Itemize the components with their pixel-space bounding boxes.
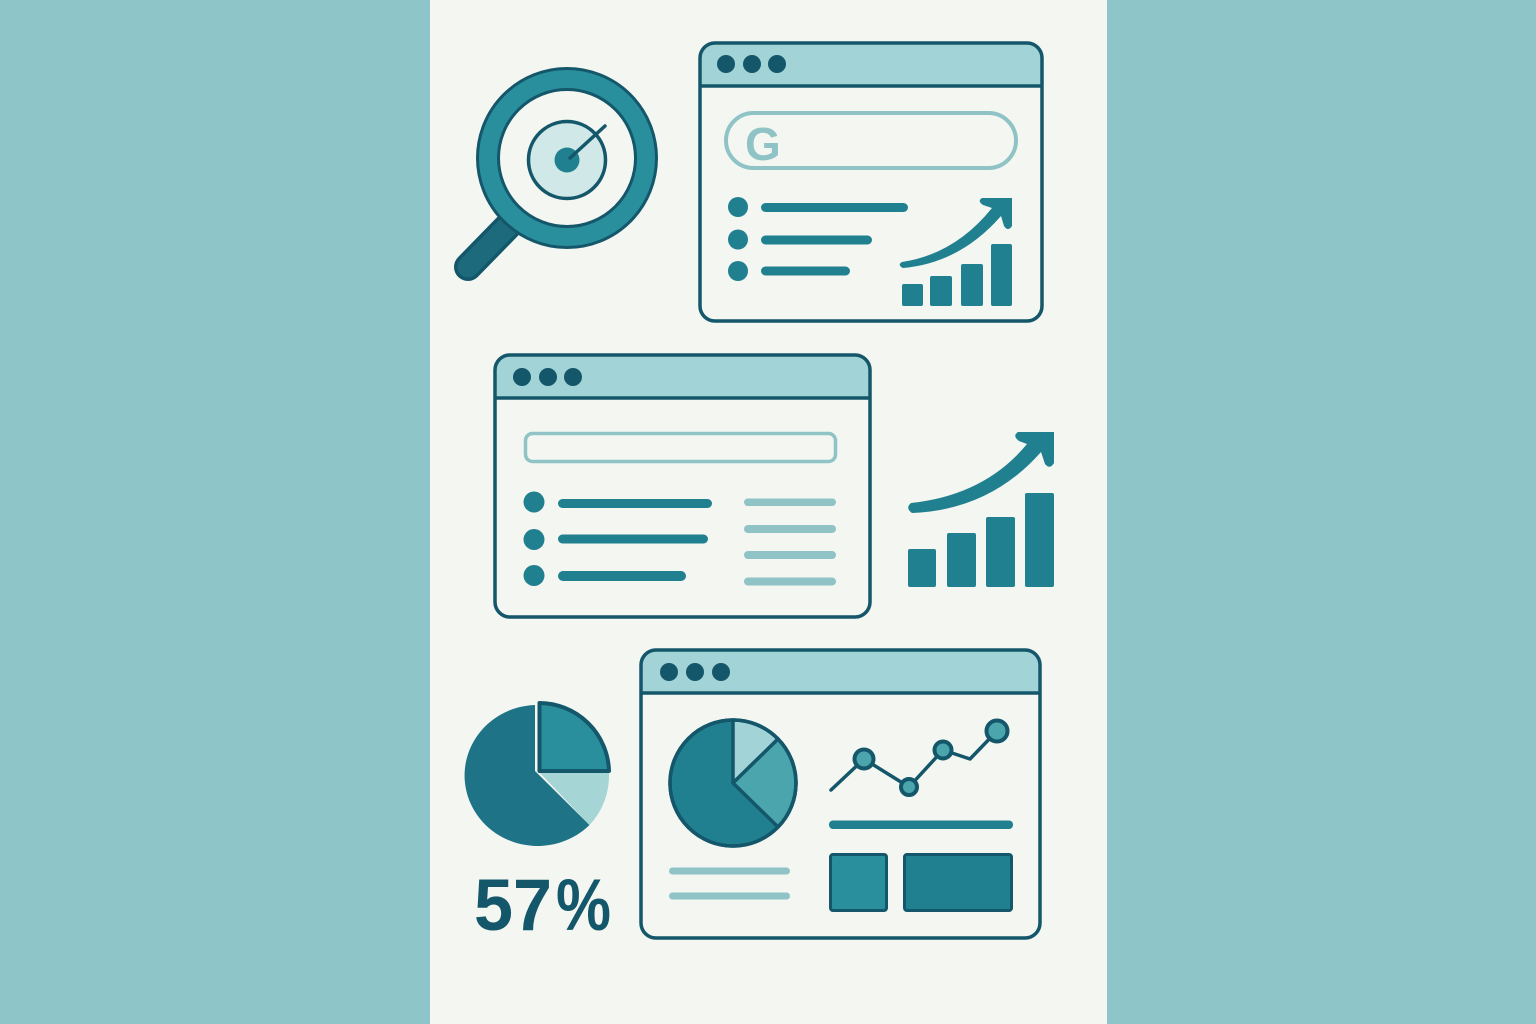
window control dots — [717, 55, 786, 73]
line chart — [831, 720, 1008, 795]
main pie slice — [465, 705, 590, 846]
dashboard divider bar — [829, 820, 1013, 829]
window control dots — [660, 663, 730, 681]
chart: standalone pie — [465, 703, 609, 846]
growth arrow — [908, 432, 1054, 513]
search logo letter: G — [745, 118, 781, 170]
search field — [526, 434, 836, 462]
panel: central column — [430, 0, 1107, 1024]
growth bar chart — [902, 244, 1012, 306]
caption lines — [669, 868, 790, 900]
chart: rising bars with arrow — [908, 432, 1054, 587]
window header bar — [641, 650, 1040, 693]
search bar — [726, 113, 1016, 168]
quarter pie slice — [540, 703, 609, 771]
result list — [728, 197, 908, 281]
dashboard pie chart — [670, 720, 796, 846]
window header bar — [495, 355, 870, 398]
magnifier ring — [488, 79, 646, 237]
result list — [524, 492, 712, 586]
bars — [908, 493, 1054, 587]
icon: magnifying glass with target — [468, 79, 646, 267]
statistic: 57 percent: 57 — [474, 865, 552, 946]
metric tiles — [830, 854, 1012, 910]
window control dots — [513, 368, 582, 386]
panel: browser window analytics dashboard — [641, 650, 1040, 938]
panel: browser window with results table — [495, 355, 870, 617]
statistic: 57 percent: % — [556, 865, 611, 946]
growth arrow — [900, 198, 1012, 268]
secondary light lines — [744, 498, 836, 586]
target centre — [528, 122, 606, 198]
window header bar — [700, 43, 1042, 86]
magnifier handle — [468, 225, 509, 267]
light pie slice — [540, 773, 609, 825]
panel: browser window with search results — [700, 43, 1042, 321]
